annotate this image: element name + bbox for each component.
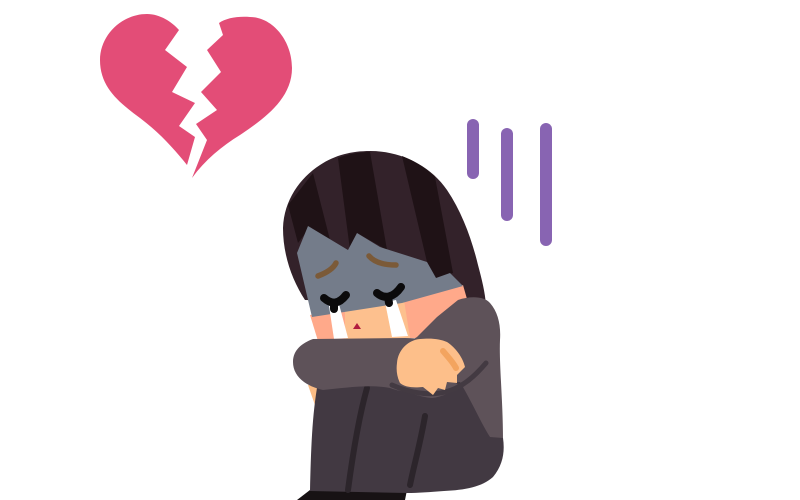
icon: broken heart xyxy=(100,14,292,178)
mouth xyxy=(353,323,361,329)
icon: gloom lines xyxy=(473,125,546,240)
trousers xyxy=(310,382,504,493)
eyebrows xyxy=(318,256,396,276)
gloom line 2 xyxy=(501,134,513,215)
sweater body xyxy=(380,297,503,440)
face shadow xyxy=(297,226,463,317)
sweater band under hand xyxy=(388,372,460,398)
face skin centre xyxy=(345,300,410,340)
tears xyxy=(329,300,408,339)
folded arm xyxy=(293,338,450,392)
face skin xyxy=(310,285,467,341)
heart right half xyxy=(192,17,292,178)
arm crease xyxy=(392,363,486,394)
heart left half xyxy=(100,14,195,165)
gloom line 1 xyxy=(467,125,479,173)
person xyxy=(283,151,504,500)
shoes xyxy=(297,490,407,500)
hand xyxy=(397,339,465,395)
closed eyes xyxy=(324,287,401,309)
hair xyxy=(283,151,486,305)
gloom line 3 xyxy=(540,129,552,240)
trouser crease lines xyxy=(348,388,425,490)
leg skin behind arm xyxy=(308,385,324,408)
